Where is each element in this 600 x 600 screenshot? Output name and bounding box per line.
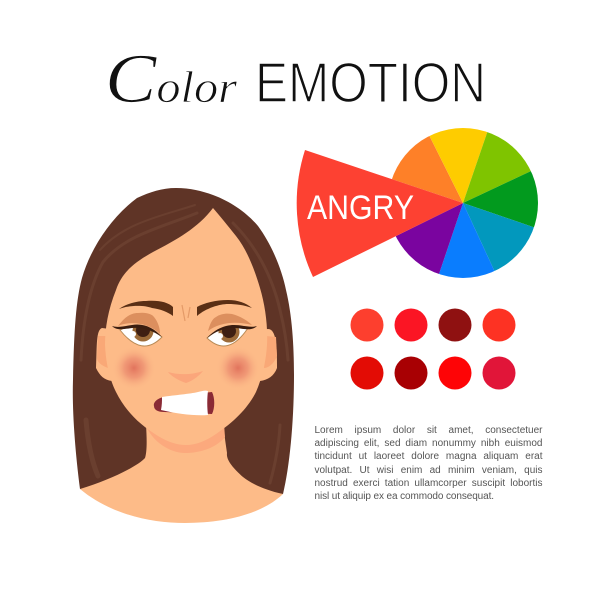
eyeshadow [118, 313, 160, 334]
paragraph text: volutpat. Ut wisi enim ad minim veniam, quis [314, 465, 542, 476]
paragraph text: tincidunt ut laoreet dolore magna aliquam erat [314, 451, 542, 462]
paragraph text [314, 425, 542, 502]
face skin [105, 208, 267, 445]
mouth [154, 391, 214, 415]
eyebrows [119, 301, 173, 316]
hair [73, 188, 294, 494]
title word: Color: Color [105, 41, 238, 118]
color swatches [350, 308, 516, 390]
paragraph text: Lorem ipsum dolor sit amet, consectetuer [314, 425, 542, 436]
nose [168, 371, 203, 383]
title [105, 41, 486, 118]
neck shadow [146, 424, 225, 453]
paragraph text: adipiscing elit, sed diam nonummy nibh euismod [314, 438, 542, 449]
neck and shoulders [80, 425, 283, 523]
title word: EMOTION: EMOTION [255, 51, 486, 115]
angry wedge [297, 150, 463, 277]
ears [96, 328, 118, 381]
woman face illustration [73, 188, 294, 523]
paragraph text: nostrud exerci tation ullamcorper suscipit lobortis [314, 478, 542, 489]
color wheel [392, 128, 538, 278]
ear shadows [97, 336, 108, 368]
paragraph text: nisl ut aliquip ex ea commodo consequat. [314, 491, 494, 502]
blush [112, 346, 156, 390]
right eye [206, 325, 257, 346]
left eye [112, 324, 162, 346]
hair highlights [81, 205, 288, 483]
wedge label: ANGRY [307, 189, 414, 227]
frown lines [182, 305, 190, 321]
